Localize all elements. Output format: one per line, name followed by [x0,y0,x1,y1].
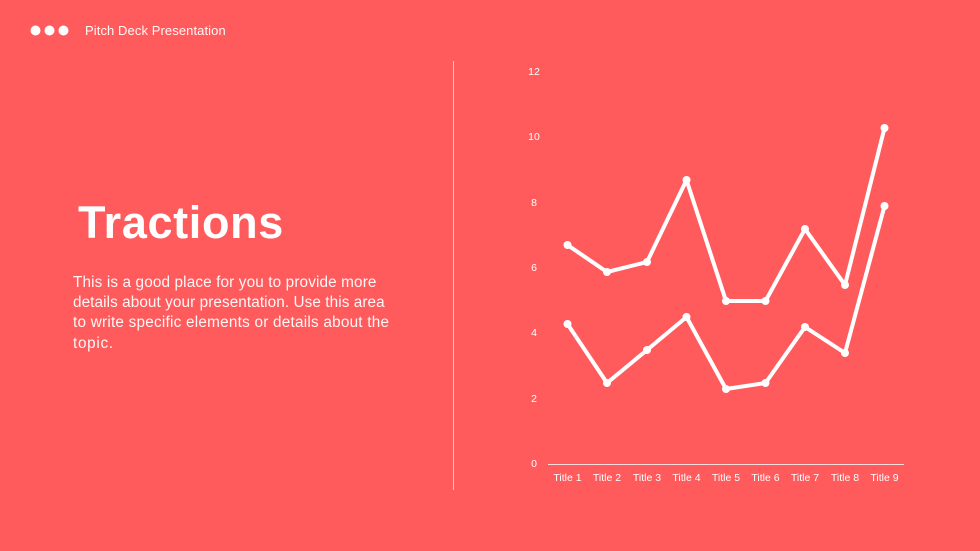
vertical divider [453,61,454,490]
y axis labels: 4 [531,327,537,339]
y axis labels: 0 [531,458,537,470]
y axis labels: 12 [528,66,540,78]
y axis labels: 6 [531,262,537,274]
x axis labels: Title 5 [712,472,740,484]
x axis labels: Title 3 [633,472,661,484]
x axis labels: Title 7 [791,472,819,484]
x axis labels: Title 1 [553,472,582,484]
x axis labels: Title 9 [870,472,899,484]
x axis labels: Title 2 [593,472,621,484]
body text [73,274,389,352]
x axis labels: Title 4 [672,472,701,484]
x axis labels: Title 6 [751,472,780,484]
y axis labels: 2 [531,393,537,405]
header: dots and deck label [30,23,226,38]
body text: to write specific elements or details about the [73,314,389,331]
x axis labels [553,472,899,484]
y axis labels [528,66,540,470]
lower data series [564,202,888,393]
body text: details about your presentation. Use this area [73,294,385,311]
x axis labels: Title 8 [831,472,859,484]
y axis labels: 8 [531,197,537,209]
upper data series [564,124,888,305]
y axis labels: 10 [528,131,540,143]
deck label: Pitch Deck Presentation [85,23,226,38]
x axis line [548,464,904,465]
icon: three dots [30,26,68,36]
title: Tractions [78,197,284,248]
body text: This is a good place for you to provide more [73,274,377,290]
body text: topic. [73,335,114,352]
